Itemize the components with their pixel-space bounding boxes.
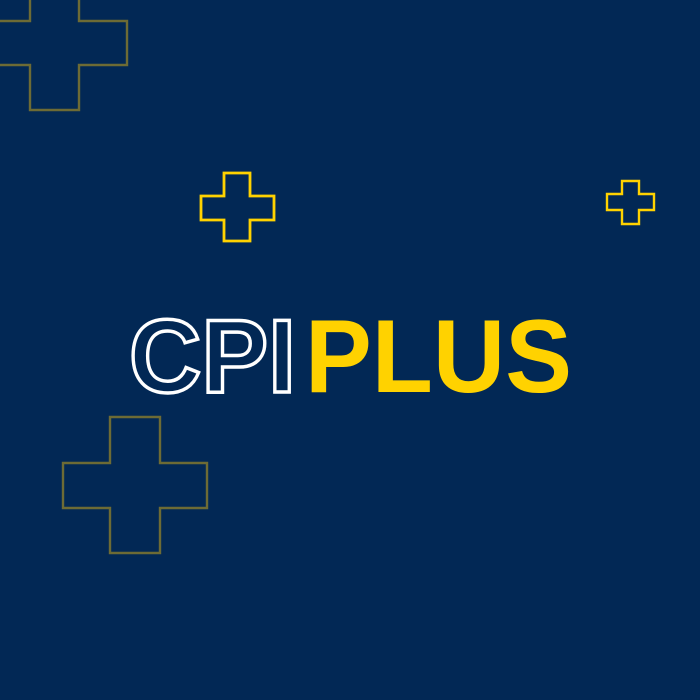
logo: CPI PLUS [129,299,572,415]
logo text: CPI outline: CPI [129,299,296,415]
icon: yellow cross right [607,181,654,224]
icon: olive cross top-left [0,0,127,110]
icon: yellow cross small [201,173,274,241]
icon: olive cross bottom-left [63,417,207,553]
logo text: PLUS: PLUS [305,299,572,415]
